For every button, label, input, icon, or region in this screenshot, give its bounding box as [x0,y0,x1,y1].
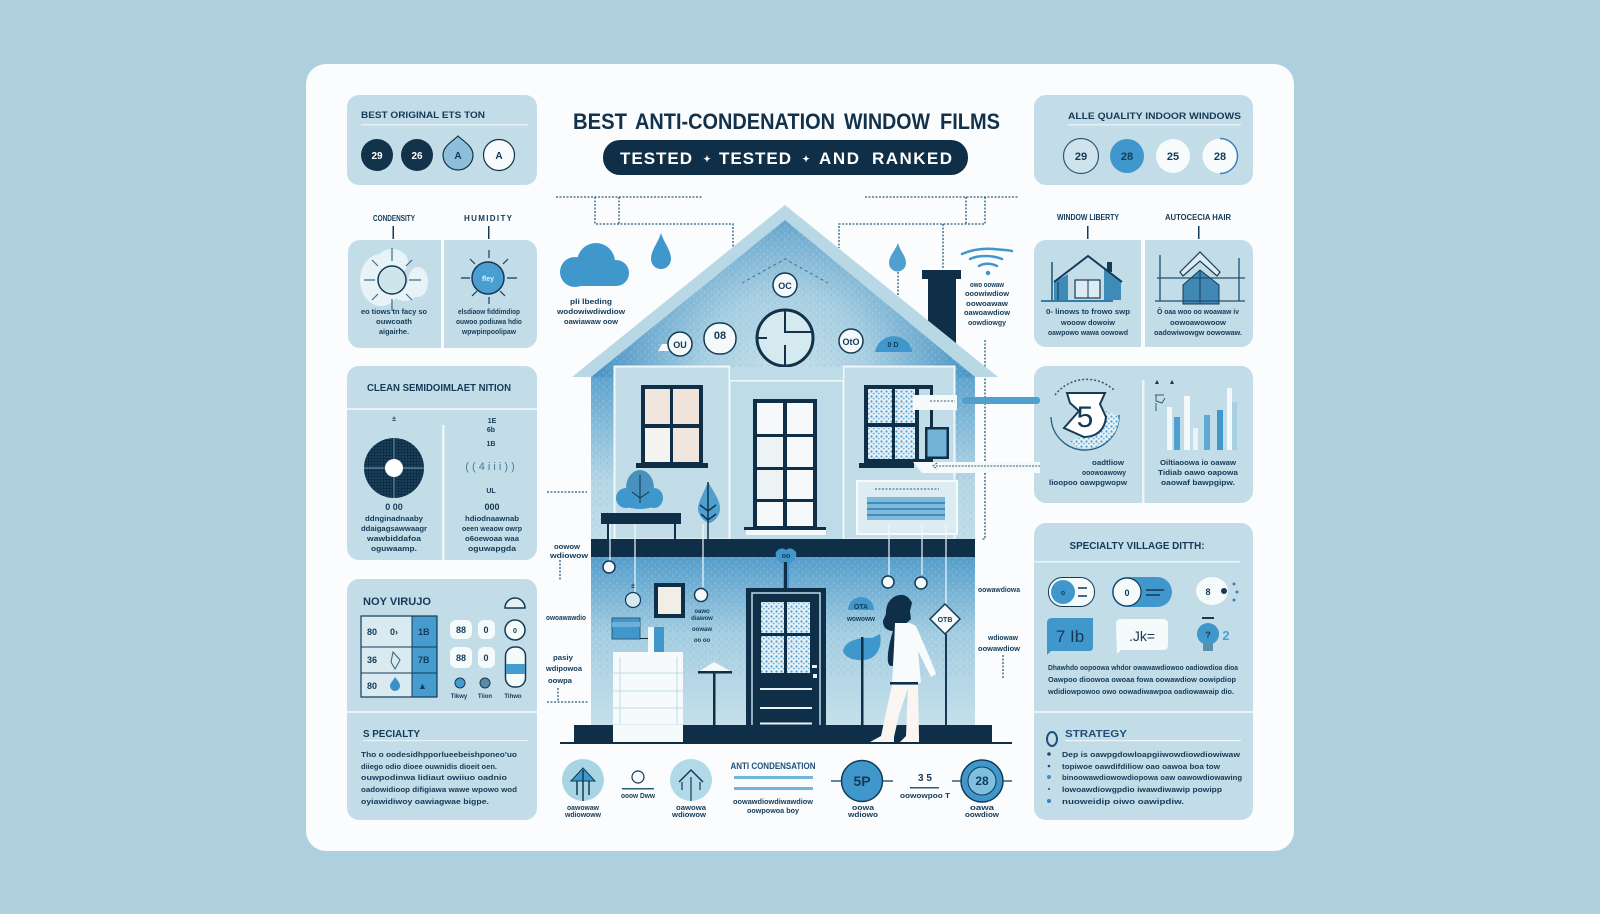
icon: water drop left [651,233,671,269]
panel: window liberty [1034,240,1141,347]
markers: diawow [691,616,713,622]
icon: target disc [364,438,424,498]
panel: noy virujo and specialty: oadowidioop difigiawa wawe wpowo wod [361,787,517,794]
panel: specialty windows and strategy: SPECIALTY VILLAGE DITTH: [1070,541,1204,552]
panel: noy virujo and specialty: NOY VIRUJO [363,596,431,608]
panel: specialty windows and strategy: binoowawdiowowdiopowa oaw oawowdiowawing [1062,775,1242,782]
dashed leader lines [547,197,1018,702]
small stat [900,773,951,800]
panel: top left ratings: A [454,151,462,162]
background card [306,64,1294,851]
small stat: oowowpoo T [900,793,951,800]
panel: clean film section: ± [392,416,396,423]
lower wall [591,557,975,727]
panel: noy virujo and specialty: Tikwy [451,694,468,700]
bottom row icons: wdiowow [671,812,707,819]
panel: humidity: fley [482,276,494,283]
attic labels: OU [673,340,687,350]
side labels right: wdiowaw [987,635,1019,642]
subtitle pill: RANKED [872,149,952,168]
attic labels: 0 D [888,342,898,349]
panel: specialty windows and strategy: .Jk= [1129,628,1155,644]
label: cloud note: oawiawaw oow [564,319,619,326]
panel: noy virujo and specialty: 88 [456,653,466,663]
title: ANTI-CONDENATION [635,109,835,134]
plant on table [601,470,681,539]
side labels right: oowawdiow [978,646,1021,653]
label: wifi note [964,282,1011,327]
icon: key connector [776,548,796,590]
label: cloud note: pli lbeding [570,299,612,306]
floor lamp [698,662,732,725]
panel: noy virujo and specialty: ouwpodinwa lidiaut owiiuo oadnio [361,775,507,782]
heading: condensity: CONDENSITY [373,214,416,223]
panel: clean film section: oguwaamp. [371,546,417,553]
bottom row icons: wdiowoww [564,812,602,819]
side labels left: oowow [554,544,581,551]
panel: top left ratings: 29 [371,151,383,162]
icon: teal dial [952,760,1012,802]
panel: top left ratings: A [495,151,503,162]
icon: house outline round [670,759,712,801]
panel: top 5 and bar chart: Oiltiaoowa io oawaw [1160,460,1237,467]
floor band [591,539,975,557]
title: BEST [573,109,628,134]
diamond sign [930,604,960,725]
attic labels: 08 [714,330,726,342]
heading: autocecia hair [1165,213,1231,239]
panel: top 5 and bar chart: Tidiab oawo oapowa [1158,470,1238,477]
small tree [698,482,720,539]
icon: number 5 badge: 5 [1077,401,1093,434]
icon: light bulb [1197,617,1230,651]
panel: top left ratings [347,95,537,185]
icon: teal dial: 28 [975,774,989,788]
panel: noy virujo and specialty: Tihwo [504,694,522,700]
panel: clean film section: oguwapgda [468,546,516,553]
panel: clean film section: oeen weaow owrp [462,526,522,533]
panel: noy virujo and specialty: 0 [483,653,489,663]
diamond sign: OTB [938,617,952,624]
panel: window liberty: oawpowo wawa oowowd [1048,330,1128,337]
panel: specialty windows and strategy: Dep is oawpgdowloapgiiwowdiowdiowiwaw [1062,752,1241,759]
small indicator: ooow Dww [621,793,656,800]
bottom row icons: oawa [970,805,994,812]
comparison table: ▲ [418,681,427,691]
panel: top 5 and bar chart: oaowaf bawpgipw. [1161,480,1235,487]
title: FILMS [940,109,1000,134]
panel: noy virujo and specialty: 0 [513,628,517,635]
panel: noy virujo and specialty: Tiion [478,694,492,700]
icon: cloud [560,243,629,287]
icon: number 5 badge [1051,379,1119,450]
bottom row icons: oawowa [676,805,706,812]
panel: autocecia hair: oowoawowoow [1170,320,1227,327]
label: wifi note: owo oowaw [970,282,1004,289]
heading: humidity [464,214,513,239]
panel: autocecia hair: Ô oaa woo oo woawaw iv [1157,307,1239,316]
callout: top arrow [913,395,1040,410]
panel: clean film section: 1B [487,441,495,448]
panel: window liberty: 0- linows to frowo swp [1046,309,1130,316]
badge on wall: wowoww [846,616,876,623]
markers [603,561,927,644]
label: wifi note: ooowiwdiow [965,291,1010,298]
panel: top left ratings: BEST ORIGINAL ETS TON [361,110,485,120]
door [746,588,826,728]
subtitle pill: ✦ [703,154,711,164]
badge on wall [846,597,876,623]
icon: blue dial [831,760,893,802]
house illustration [560,205,1040,744]
connector lines [610,524,946,605]
callout: bottom arrow [913,462,1040,473]
side labels left: wdiowow [549,553,589,560]
label: wifi note: oowdiowgy [968,320,1006,327]
panel: humidity: wpwpinpoolipaw [461,329,517,336]
centre caption [730,761,816,815]
bottom row icons [562,759,1012,819]
comparison table: 36 [367,655,377,665]
wall frame [654,583,685,618]
panel: specialty windows and strategy: 8 [1205,587,1211,597]
panel: specialty windows and strategy: Oawpoo dioowoa owoaa fowa oowawdiow oowipdiop [1048,677,1236,684]
attic labels: OC [778,281,792,291]
heading: condensity [373,214,416,239]
panel: top right ratings: 29 [1075,151,1087,163]
markers: oo oo [694,638,710,644]
heading: humidity: HUMIDITY [464,214,513,223]
heading: autocecia hair: AUTOCECIA HAIR [1165,213,1231,222]
small indicator [621,771,656,800]
woman [870,595,936,742]
panel: specialty windows and strategy: STRATEGY [1065,729,1127,740]
bottom row icons: oawowaw [567,805,600,812]
panel: clean film section: 000 [484,502,500,512]
panel: clean film section [347,366,537,560]
attic labels: OtO [842,337,860,347]
panel: noy virujo and specialty: 88 [456,625,466,635]
window left [636,385,708,468]
panel: condensity: eo tiows tn facy so [361,309,427,316]
subtitle pill: TESTED [620,149,692,168]
panel: humidity: elsdiaow fiddimdiop [458,309,520,316]
bottom row icons: oowa [852,805,874,812]
title: WINDOW [844,109,930,134]
panel: autocecia hair: oadowiwowgw oowowaw. [1154,330,1242,337]
panel: specialty windows and strategy: o [1061,590,1065,597]
label: cloud note [556,299,626,326]
panel: clean film section: ddaigagsawwaagr [361,526,427,533]
panel: specialty windows and strategy: Dhawhdo oopoowa whdor owawawdiowoo oadiowdioa dioa [1048,665,1238,672]
bar chart: ▲ [1169,379,1175,386]
icon: wifi [962,249,1012,274]
panel: clean film section: 1E [488,418,497,425]
bar chart [1154,379,1237,450]
panel: top 5 and bar chart [1034,366,1253,503]
dresser [613,627,683,742]
heading: window liberty: WINDOW LIBERTY [1057,213,1120,222]
panel: top left ratings: 26 [411,151,423,162]
wall screen [612,618,648,639]
label: cloud note: wodowiwdiwdiow [556,309,626,316]
panel: clean film section: o6oewoaa waa [465,536,519,543]
panel: condensity [348,240,441,348]
comparison table: 0› [390,627,398,637]
side labels right [978,587,1021,653]
panel: condensity: aigairhe. [379,329,409,336]
panel: clean film section: CLEAN SEMIDOIMLAET NITION [367,383,511,394]
panel: window liberty: wooow dowoiw [1060,320,1116,327]
panel: specialty windows and strategy: lowoawdiowgpdio iwawdiwawip powipp [1062,787,1222,794]
roof [572,205,998,377]
panel: top 5 and bar chart: lioopoo oawpgwopw [1049,480,1128,487]
panel: specialty windows and strategy [1034,523,1253,820]
base [560,725,1012,744]
centre caption: ANTI CONDENSATION [730,761,816,771]
chimney [922,270,961,349]
panel: specialty windows and strategy: 7 Ib [1056,627,1084,646]
panel: specialty windows and strategy: topiwoe oawdifdiliow oao oawoa boa tow [1062,764,1221,771]
window right with condensation [859,385,949,468]
heading: window liberty [1057,213,1120,239]
panel: top right ratings: 28 [1214,151,1226,163]
panel: clean film section: wawbiddafoa [366,536,421,543]
panel: top right ratings: ALLE QUALITY INDOOR WINDOWS [1068,111,1241,121]
comparison table: 1B [418,627,430,637]
icon: house section [1155,252,1245,304]
comparison table: 80 [367,627,377,637]
comparison table [361,616,437,697]
panel: humidity [444,240,537,348]
panel: clean film section: UL [486,488,496,495]
bottom row icons: wdiowo [847,812,878,819]
bar chart: ▲ [1154,379,1160,386]
subtitle pill [603,140,968,175]
panel: clean film section: ( ( 4 i i i ) ) [465,461,515,473]
subtitle pill: AND [819,149,859,168]
centre caption: oowpowoa boy [747,808,799,815]
title [573,109,1000,134]
upper wall [591,366,975,540]
icon: key connector: oo [782,553,790,560]
panel: top 5 and bar chart: oadtliow [1092,460,1125,467]
panel: specialty windows and strategy: nuoweidip oiwo oawipdiw. [1062,799,1184,806]
icon: light bulb: ? [1205,630,1211,640]
panel: noy virujo and specialty: 0 [483,625,489,635]
icon: round attic window [757,310,813,366]
panel: noy virujo and specialty: S PECIALTY [363,729,420,740]
panel: humidity: ouwoo podiuwa hdio [456,319,522,326]
panel: specialty windows and strategy: 0 [1124,588,1130,598]
panel: clean film section: 0 00 [385,502,403,512]
panel: noy virujo and specialty: Tho o oodesidhpporlueebeishponeo'uo [361,752,517,759]
attic labels [658,273,912,356]
small stat: 3 5 [918,773,932,784]
panel: noy virujo and specialty: oyiawidiwoy oawiagwae bigpe. [361,799,489,806]
side labels left: wdipowoa [545,666,582,673]
label: wifi note: oowoawaw [966,301,1009,308]
side labels right: oowawdiowa [978,587,1020,594]
panel: noy virujo and specialty: diiego odio dioee ouwnidis dioeit oen. [361,764,497,771]
icon: ring [1047,732,1057,746]
centre caption: oowawdiowdiwawdiow [733,799,814,806]
comparison table: 7B [418,655,430,665]
panel: top right ratings [1034,95,1253,185]
panel: top right ratings: 28 [1121,151,1133,163]
icon: water drop right [889,243,906,272]
subtitle pill: ✦ [802,154,810,164]
badge on wall: OTA [854,604,868,611]
panel: specialty windows and strategy: wdidiowpowoo owo oowadiwawpoa oadiowawaip dio. [1047,689,1234,696]
icon: blue dial: 5P [853,773,871,789]
panel: top right ratings: 25 [1167,151,1179,163]
panel: clean film section: 6b [487,427,495,434]
ac unit [857,481,957,534]
side labels left [545,544,589,685]
icon: light bulb: 2 [1222,628,1230,643]
icon: house outline [1041,256,1122,302]
side labels left: oowpa [548,678,572,685]
label: wifi note: oawoawdiow [964,310,1011,317]
icon: house arrow [562,759,604,801]
markers: oowaw [692,627,712,633]
bottom row icons: oowdiow [965,812,1000,819]
panel: clean film section: hdiodnaawnab [465,516,519,523]
panel: autocecia hair [1145,240,1253,347]
markers: oawo [694,609,710,615]
leaf sign [843,634,881,725]
panel: top 5 and bar chart: ooowoawowy [1082,470,1126,477]
markers: ± [631,583,635,590]
panel: clean film section: ddnginadnaaby [365,516,423,523]
side labels left: pasiy [553,655,573,662]
comparison table: 80 [367,681,377,691]
panel: noy virujo and specialty [347,579,537,820]
window centre [744,399,826,535]
subtitle pill: TESTED [719,149,791,168]
panel: condensity: ouwcoath [376,319,412,326]
side labels left: owoawawdio [546,615,586,622]
